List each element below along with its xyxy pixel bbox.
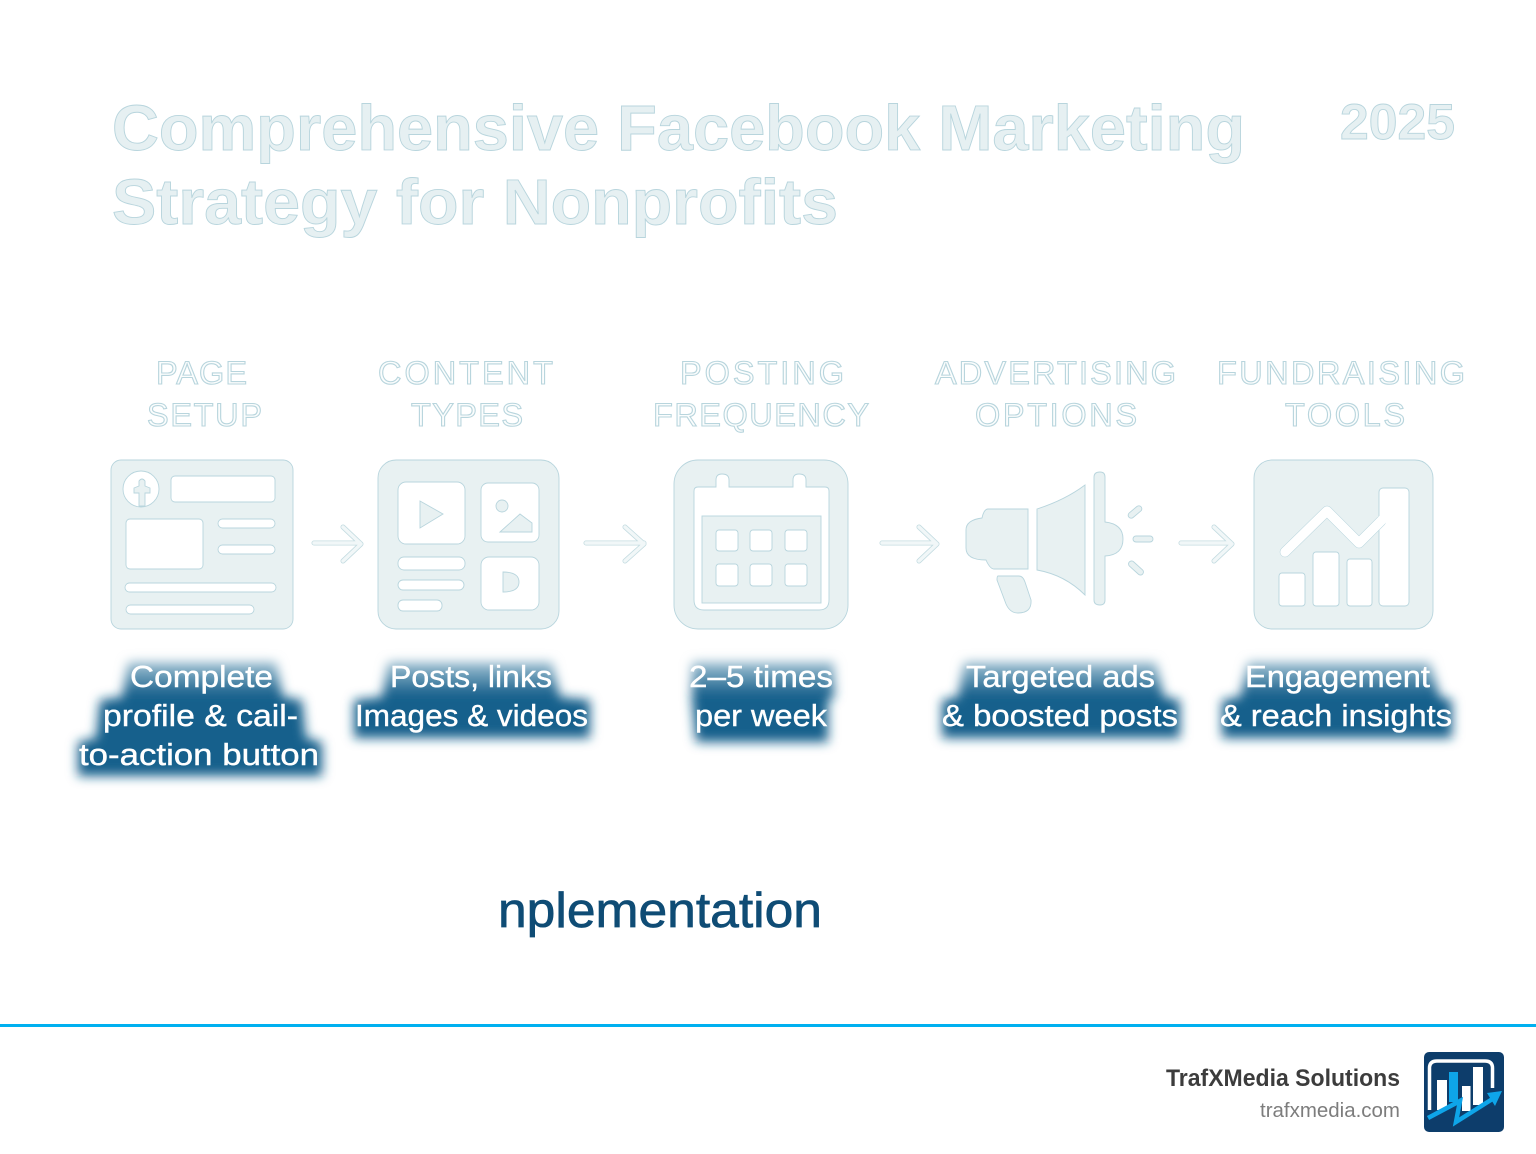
brand url: trafxmedia.com bbox=[1260, 1099, 1400, 1122]
heading: fundraising tools bbox=[1217, 355, 1465, 433]
heading: page setup bbox=[147, 355, 262, 433]
caption: page setup bbox=[78, 659, 322, 776]
heading: advertising options: ADVERTISING bbox=[935, 355, 1176, 391]
icon: page setup bbox=[111, 460, 293, 629]
arrow 1 bbox=[314, 527, 361, 561]
heading: posting frequency bbox=[653, 355, 869, 433]
heading: content types: CONTENT bbox=[378, 355, 553, 391]
icon: insights chart bbox=[1254, 460, 1433, 629]
title: Comprehensive Facebook Marketing bbox=[112, 92, 1245, 164]
heading: content types bbox=[378, 355, 553, 433]
icon: posting frequency calendar bbox=[674, 460, 848, 629]
arrow 2 bbox=[586, 527, 644, 561]
caption: content types: Posts, links bbox=[390, 659, 552, 694]
icon: content types bbox=[378, 460, 559, 629]
heading: page setup: PAGE bbox=[156, 355, 247, 391]
caption: fundraising tools: & reach insights bbox=[1220, 698, 1452, 733]
logo bbox=[1424, 1052, 1504, 1132]
title: Strategy for Nonprofits bbox=[112, 166, 838, 238]
heading: fundraising tools: FUNDRAISING bbox=[1217, 355, 1465, 391]
heading: fundraising tools: TOOLS bbox=[1285, 397, 1405, 433]
title bbox=[112, 92, 1245, 238]
icon: megaphone bbox=[966, 472, 1153, 613]
caption: advertising options bbox=[942, 659, 1180, 738]
implementation text: nplementation bbox=[498, 884, 822, 938]
caption: advertising options: Targeted ads bbox=[966, 659, 1155, 694]
caption: posting frequency: per week bbox=[695, 698, 828, 733]
caption: page setup: to-action button bbox=[79, 737, 319, 772]
heading: advertising options bbox=[935, 355, 1176, 433]
heading: advertising options: OPTIONS bbox=[975, 397, 1137, 433]
caption: fundraising tools bbox=[1220, 659, 1452, 738]
caption: content types bbox=[354, 659, 590, 738]
caption: content types: Images & videos bbox=[355, 698, 588, 733]
heading: content types: TYPES bbox=[411, 397, 523, 433]
footer rule bbox=[0, 1024, 1536, 1027]
caption: posting frequency: 2–5 times bbox=[689, 659, 833, 694]
caption: fundraising tools: Engagement bbox=[1245, 659, 1430, 694]
heading: page setup: SETUP bbox=[147, 397, 262, 433]
arrow 3 bbox=[882, 527, 937, 561]
caption: page setup: profile & cail- bbox=[103, 698, 298, 733]
heading: posting frequency: POSTING bbox=[680, 355, 844, 391]
heading: posting frequency: FREQUENCY bbox=[653, 397, 869, 433]
caption: posting frequency bbox=[689, 659, 834, 742]
caption: advertising options: & boosted posts bbox=[942, 698, 1178, 733]
year: 2025 bbox=[1340, 94, 1455, 150]
arrow 4 bbox=[1181, 527, 1232, 561]
caption: page setup: Complete bbox=[130, 659, 273, 694]
brand name: TrafXMedia Solutions bbox=[1166, 1065, 1400, 1092]
